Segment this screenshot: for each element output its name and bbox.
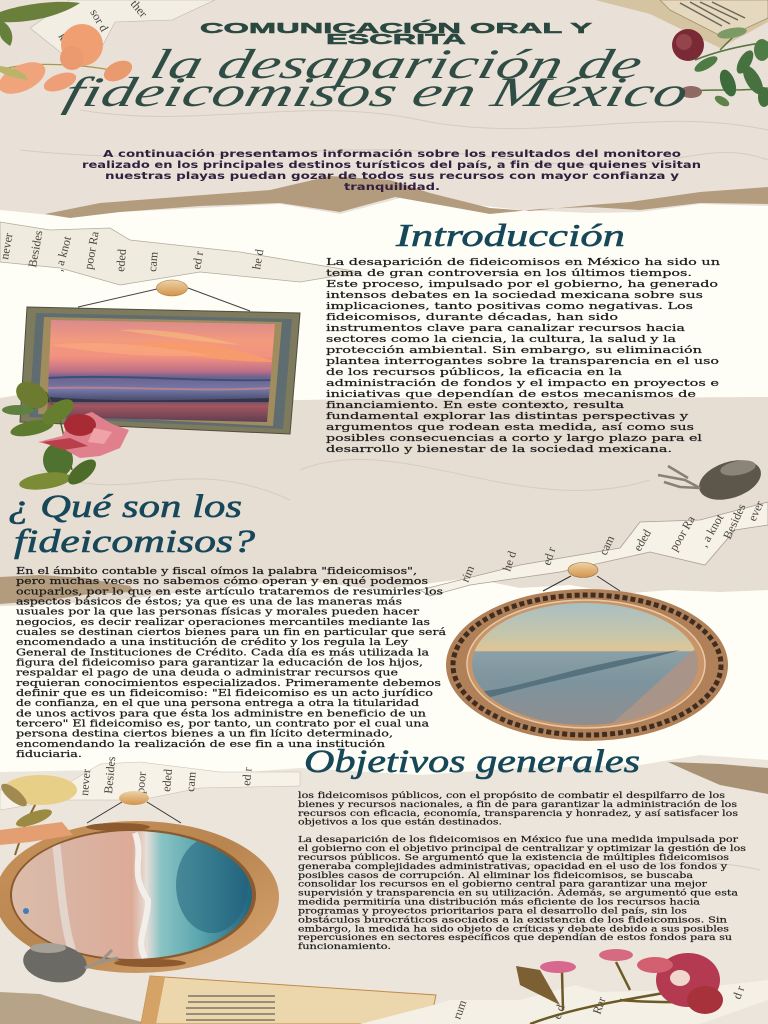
- text block: objetivos generales: posibles casos de corrupción. Al eliminar los fideicomisos, se buscaba: [298, 870, 693, 880]
- torn newspaper strip bottom: rum: [450, 997, 470, 1021]
- text block: qué son los fideicomisos: fiduciaria.: [16, 749, 82, 760]
- torn newspaper strip right: ever: [745, 499, 766, 523]
- torn newspaper strip left: eded: [113, 248, 129, 272]
- text block: qué son los fideicomisos: definir que es un fideicomiso: "El fideicomiso es un acto jurídico: [16, 688, 433, 699]
- torn newspaper strip lower: poor: [133, 771, 149, 794]
- torn newspaper strip lower: ed r: [239, 767, 255, 786]
- subtitle script: [60, 42, 693, 116]
- torn newspaper strip right: rim: [458, 563, 477, 584]
- text block: introducción: financiamiento. En este contexto, resulta: [326, 400, 624, 411]
- heading: objetivos generales: Objetivos generales: [304, 744, 640, 780]
- torn newspaper strip right: ed r: [540, 545, 559, 567]
- text block: qué son los fideicomisos: encomendado a una institución de crédito y los regula la Ley: [16, 637, 409, 648]
- text block: qué son los fideicomisos: figura del fideicomiso para garantizar la educación de los hijos,: [16, 658, 423, 668]
- torn newspaper strip top left: [30, 0, 215, 60]
- text block: introducción: instrumentos clave para canalizar recursos hacia: [326, 323, 685, 334]
- text block: qué son los fideicomisos: ocuparlos, por lo que en este artículo trataremos de resumirles los: [16, 586, 443, 597]
- text block: qué son los fideicomisos: usuales por la que las personas físicas y morales pueden hacer: [16, 607, 420, 618]
- text block: introducción: [326, 257, 720, 455]
- torn newspaper strip right: , a knot: [696, 511, 727, 550]
- text block: objetivos generales: repercusiones en sectores específicos que dependían de estos fondos para su: [298, 932, 733, 942]
- torn newspaper strip left: he d: [249, 248, 266, 271]
- text block: introducción: tema de gran controversia en los últimos tiempos.: [326, 268, 692, 279]
- oval framed shoreline picture: [0, 791, 279, 973]
- dried yellow flowers and tape: [0, 775, 77, 855]
- torn newspaper strip top left: sor d: [87, 7, 111, 34]
- text block: qué son los fideicomisos: aspectos básicos de éstos; ya que es una de las maneras más: [16, 596, 402, 608]
- text block: introducción: posibles consecuencias a corto y largo plazo para el: [326, 433, 702, 444]
- orange flowers and leaves top left: [0, 2, 135, 100]
- text block: introducción: argumentos que rodean esta medida, así como sus: [326, 422, 694, 433]
- subtitle script: fideicomisos en México: [60, 70, 693, 116]
- text block: qué son los fideicomisos: General de Instituciones de Crédito. Cada día es más utilizada la: [16, 647, 429, 658]
- text block: introducción: plantea interrogantes sobre la transparencia en el uso: [326, 356, 719, 367]
- torn newspaper strip left: [0, 222, 360, 285]
- dark rose and leaves top right: [672, 25, 768, 108]
- torn newspaper strip bottom: e d: [550, 1003, 568, 1021]
- moth lower: [21, 940, 118, 986]
- intro paragraph: A continuación presentamos información sobre los resultados del monitoreo: [103, 148, 681, 160]
- torn newspaper strip lower: never: [77, 768, 93, 796]
- torn newspaper strip right: eded: [630, 527, 654, 554]
- rose with leaves: [2, 376, 129, 493]
- text block: introducción: iniciativas que dependían de estos mecanismos de: [326, 389, 696, 400]
- subtitle script: la desaparición de: [146, 42, 647, 88]
- heading: Introducción: Introducción: [395, 217, 625, 253]
- text block: objetivos generales: La desaparición de los fideicomisos en México fue una medida impulsada por: [298, 834, 738, 844]
- text block: introducción: protección ambiental. Sin embargo, su eliminación: [326, 345, 702, 356]
- text block: introducción: fundamental explorar las distintas perspectivas y: [326, 411, 689, 422]
- text block: qué son los fideicomisos: [16, 566, 446, 760]
- intro paragraph: [82, 148, 701, 193]
- text block: introducción: intensos debates en la sociedad mexicana sobre sus: [326, 290, 703, 301]
- text block: objetivos generales: [298, 790, 746, 951]
- torn newspaper strip lower: [0, 756, 300, 810]
- pink pressed flowers bottom right: [516, 949, 723, 1024]
- open book bottom: [141, 976, 436, 1024]
- torn newspaper strip lower: Besides: [101, 756, 118, 794]
- text block: objetivos generales: generaba complejidades administrativas, opacidad en el uso de los fondos y: [298, 861, 727, 871]
- text block: qué son los fideicomisos: de confianza, en el que una persona entrega a otra la titularidad: [16, 698, 419, 709]
- text block: objetivos generales: obstáculos burocráticos asociados a la existencia de los fideicomisos. Sin: [298, 914, 728, 924]
- oval framed beach picture: [446, 562, 728, 741]
- text block: objetivos generales: supervisión y transparencia en su utilización. Además, se argumentó que esta: [298, 888, 738, 898]
- title: COMUNICACIÓN ORAL Y: [200, 19, 593, 37]
- torn newspaper strip right: he d: [500, 549, 519, 573]
- text block: objetivos generales: recursos con eficacia, economía, transparencia y honradez, y así satisfacer los: [298, 808, 738, 818]
- text block: objetivos generales: el gobierno con el objetivo principal de centralizar y optimizar la gestión de los: [298, 843, 746, 853]
- text block: introducción: La desaparición de fideicomisos en México ha sido un: [326, 257, 720, 268]
- torn newspaper strip lower: cam: [183, 770, 199, 792]
- open book top right: [595, 0, 768, 48]
- text block: objetivos generales: objetivos a los que están destinados.: [298, 816, 502, 826]
- text block: introducción: desarrollo y bienestar de la sociedad mexicana.: [326, 444, 672, 455]
- heading: qué son los fideicomisos: [8, 489, 256, 560]
- moth: [658, 453, 766, 507]
- torn newspaper strip right: cam: [596, 533, 617, 557]
- text block: objetivos generales: recursos públicos. Se argumentó que la existencia de múltiples fideicomisos: [298, 852, 729, 862]
- title: ESCRITA: [326, 32, 467, 48]
- text block: objetivos generales: medida permitiría una distribución más eficiente de los recursos hacia: [298, 897, 700, 907]
- text block: qué son los fideicomisos: En el ámbito contable y fiscal oímos la palabra "fideicomisos",: [16, 566, 417, 577]
- text block: qué son los fideicomisos: persona destina ciertos bienes a un fin lícito determinado,: [16, 729, 393, 740]
- torn newspaper strip left: ed r: [189, 250, 206, 271]
- text block: qué son los fideicomisos: respaldar el pago de una deuda o administrar recursos que: [16, 668, 398, 679]
- text block: qué son los fideicomisos: requieran conocimientos especializados. Primeramente debemos: [16, 678, 441, 689]
- torn newspaper strip bottom: [360, 980, 768, 1024]
- text block: qué son los fideicomisos: negocios, es decir realizar operaciones mercantiles mediante las: [16, 617, 430, 628]
- text block: introducción: implicaciones, tanto positivas como negativas. Los: [326, 301, 693, 312]
- text block: introducción: administración de fondos y el impacto en proyectos e: [326, 378, 719, 389]
- text block: objetivos generales: los fideicomisos públicos, con el propósito de combatir el despilfarro de los: [298, 790, 725, 800]
- text block: qué son los fideicomisos: de unos activos para que ésta los administre en beneficio de un: [16, 708, 426, 719]
- text block: introducción: fideicomisos, durante décadas, han sido: [326, 312, 618, 323]
- text block: introducción: Este proceso, impulsado por el gobierno, ha generado: [326, 279, 718, 290]
- text block: objetivos generales: consolidar los recursos en el gobierno central para garantizar una mejor: [298, 879, 707, 889]
- torn newspaper strip bottom: Rar: [590, 995, 609, 1016]
- framed sunset picture: [20, 280, 300, 434]
- torn newspaper strip right: [420, 499, 768, 596]
- torn newspaper strip right: poor Ra: [666, 513, 698, 554]
- text block: objetivos generales: programas y proyectos prioritarios para el desarrollo del país, sin los: [298, 906, 687, 916]
- text block: objetivos generales: funcionamiento.: [298, 941, 391, 951]
- intro paragraph: nuestras playas puedan gozar de todos sus recursos con mayor confianza y: [105, 171, 680, 182]
- torn newspaper strip left: , a knot: [51, 234, 74, 273]
- torn newspaper strip lower: eded: [159, 768, 175, 792]
- text block: introducción: de los recursos públicos, la eficacia en la: [326, 367, 622, 378]
- heading: qué son los fideicomisos: fideicomisos?: [14, 524, 256, 560]
- torn newspaper strip left: poor Ra: [81, 230, 102, 271]
- torn newspaper strip left: Besides: [25, 229, 45, 269]
- torn newspaper strip left: cam: [145, 250, 161, 272]
- text block: qué son los fideicomisos: pero muchas veces no sabemos cómo operan y en qué podemos: [16, 576, 428, 587]
- intro paragraph: realizado en los principales destinos turísticos del país, a fin de que quienes visitan: [82, 159, 701, 171]
- text block: objetivos generales: embargo, la medida ha sido objeto de críticas y debate debido a sus posibles: [298, 923, 729, 933]
- heading: qué son los fideicomisos: ¿ Qué son los: [8, 489, 242, 525]
- text block: qué son los fideicomisos: encomendando la realización de ese fin a una institución: [16, 739, 385, 750]
- text block: objetivos generales: bienes y recursos nacionales, a fin de para garantizar la administración de los: [298, 799, 737, 809]
- torn newspaper strip top left: knot: [55, 30, 79, 57]
- text block: qué son los fideicomisos: cuales se destinan ciertos bienes para un fin en particular que será: [16, 627, 446, 638]
- torn newspaper strip bottom: d r: [730, 984, 747, 1001]
- intro paragraph: tranquilidad.: [344, 182, 440, 193]
- text block: qué son los fideicomisos: tercero" El fideicomiso es, por tanto, un contrato por el cual una: [16, 718, 429, 730]
- text block: introducción: sectores como la ciencia, la cultura, la salud y la: [326, 334, 676, 345]
- torn newspaper strip right: Besides: [720, 501, 749, 541]
- title: [200, 19, 593, 48]
